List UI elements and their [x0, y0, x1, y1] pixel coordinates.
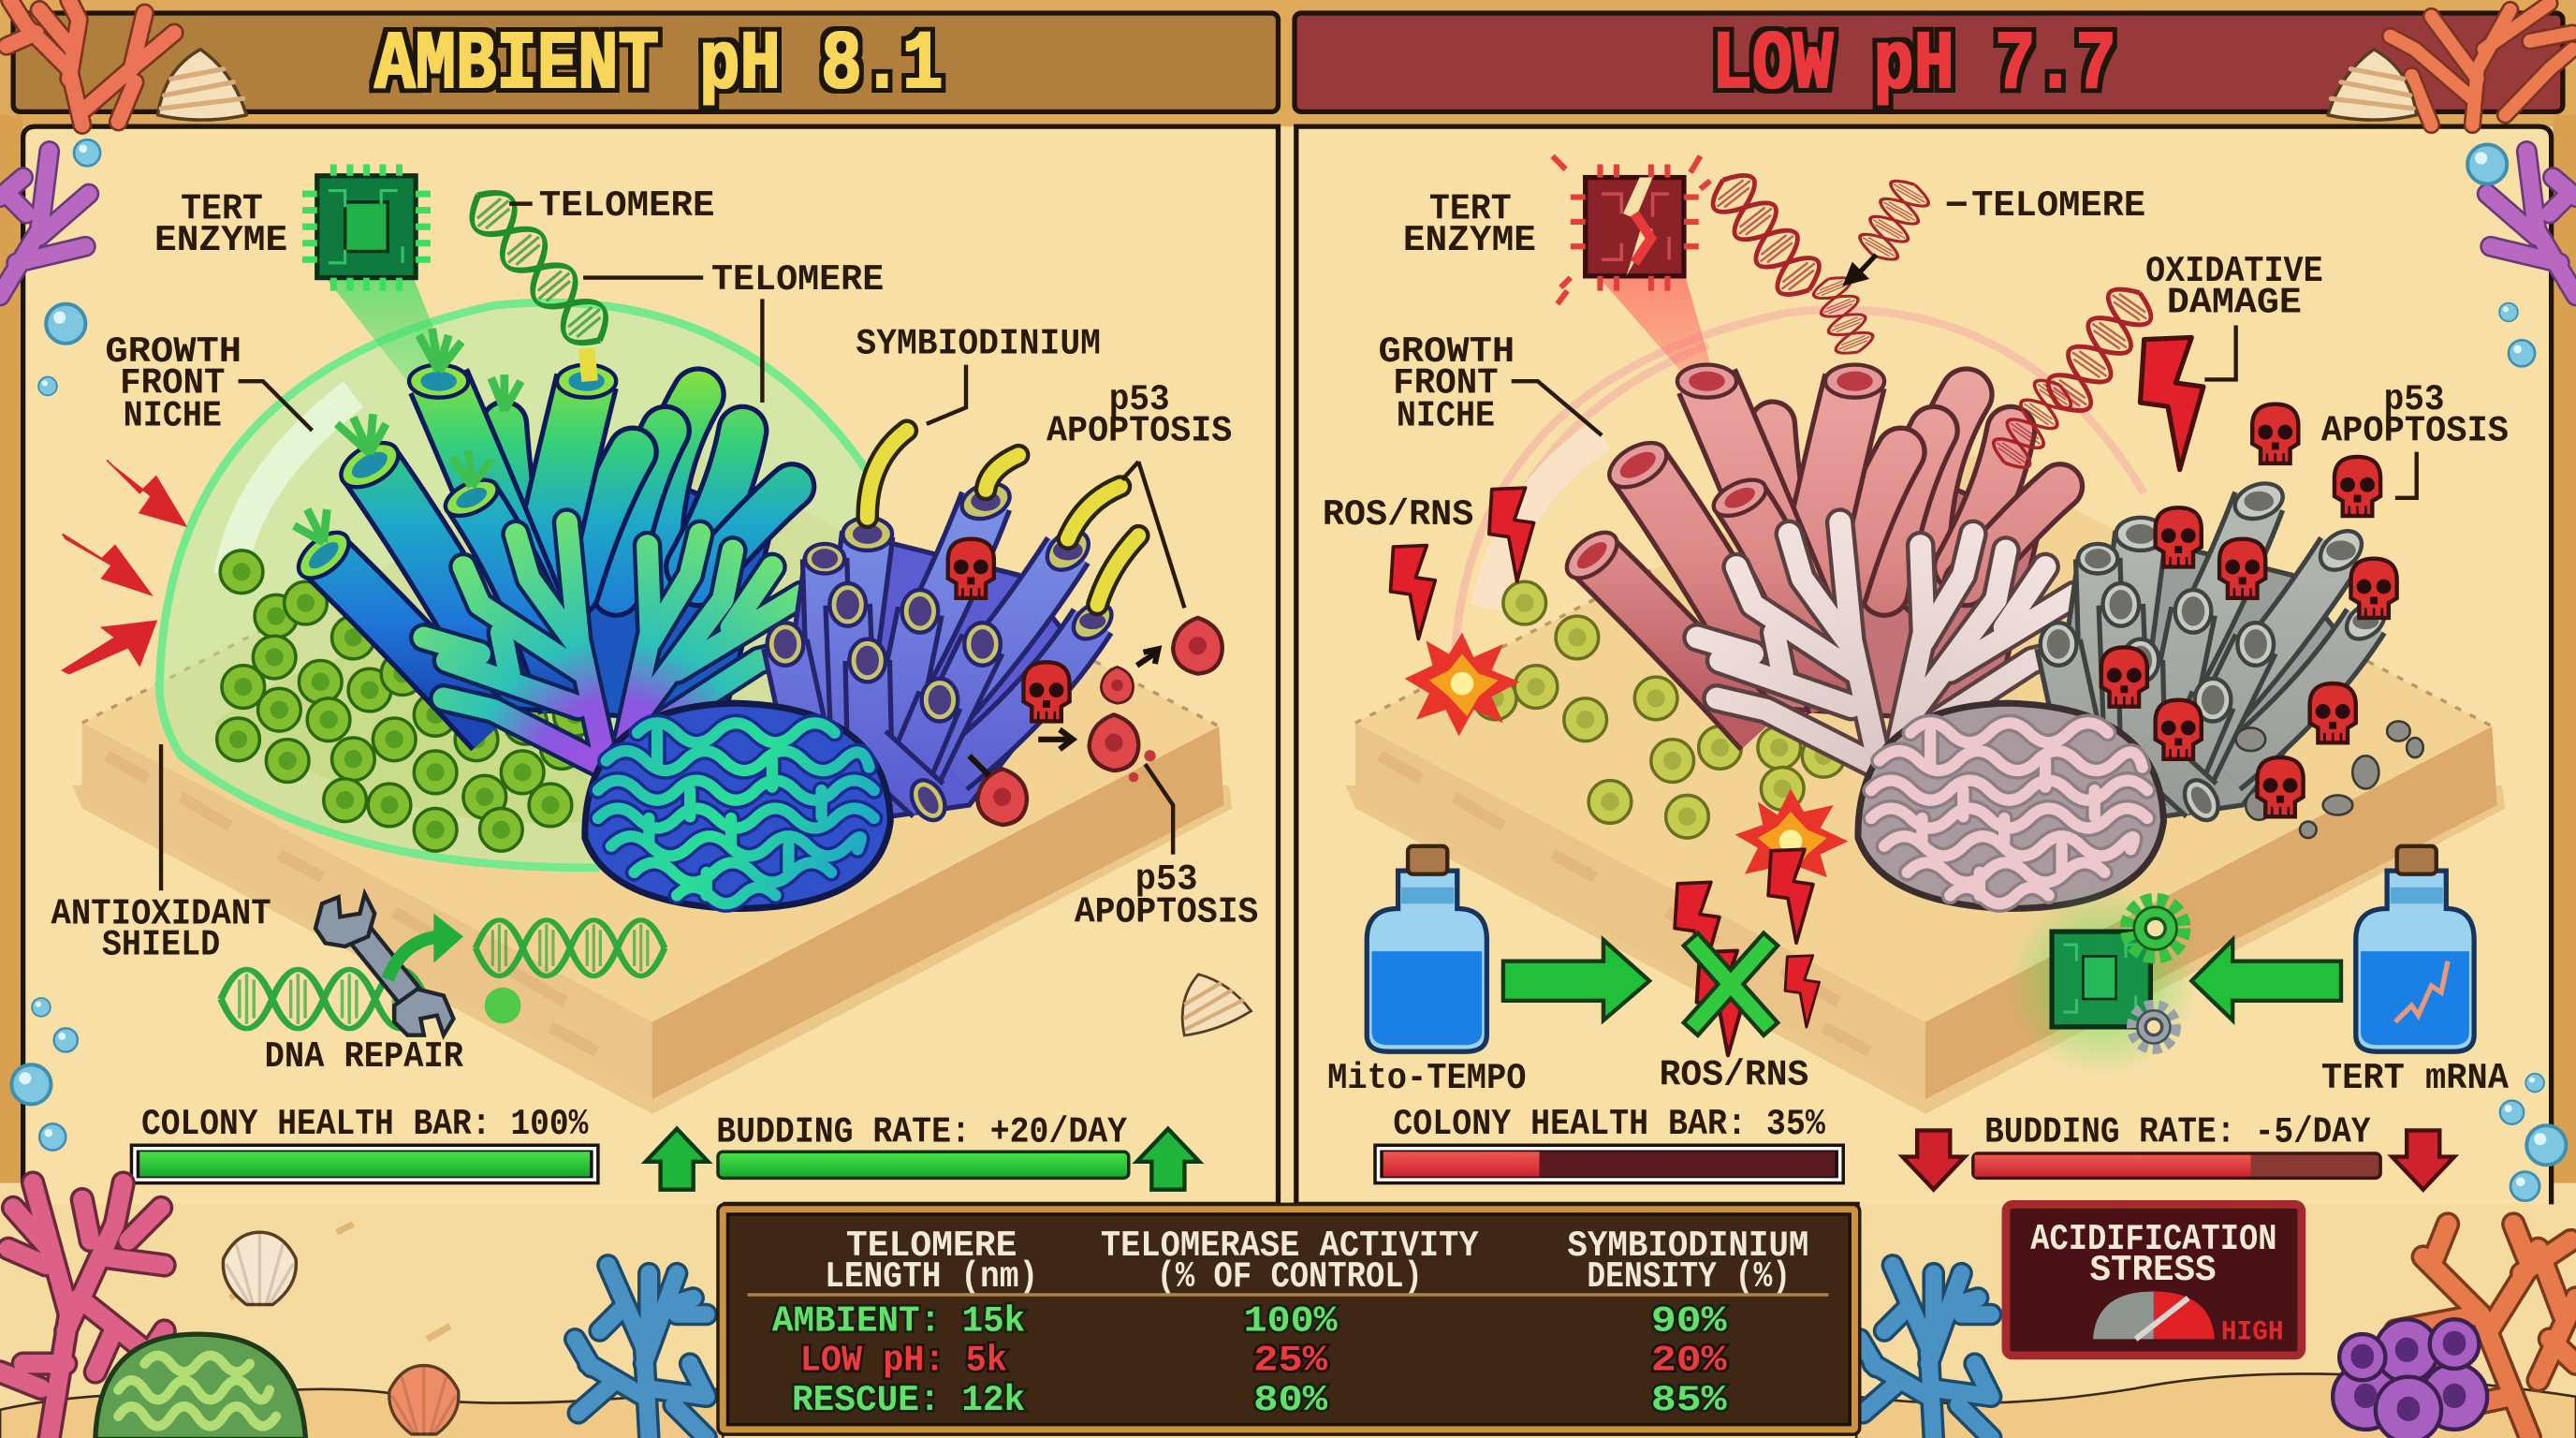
shell on ambient sand — [1166, 961, 1252, 1039]
labels: low pH panel: ROS/RNS — [1323, 494, 1473, 536]
data table: 25% — [1253, 1341, 1328, 1382]
budding rate bar: low pH — [1902, 1112, 2454, 1190]
labels: low pH panel: Mito-TEMPO — [1327, 1058, 1526, 1099]
isometric sand slab: ambient — [72, 431, 1232, 1114]
labels: low pH panel: OXIDATIVE — [2145, 251, 2323, 292]
acidification stress badge: HIGH — [2221, 1315, 2284, 1347]
budding rate bar: ambient — [646, 1112, 1199, 1190]
icon: DNA repair with wrench — [221, 894, 665, 1035]
icon: telomere DNA ambient — [460, 181, 618, 356]
icon: TERT chip ambient — [302, 165, 431, 291]
brain coral: healthy — [585, 703, 890, 909]
labels: ambient panel — [51, 185, 1258, 1078]
data table: 85% — [1651, 1380, 1728, 1421]
symbiodinium cells: ambient — [217, 550, 596, 851]
labels: low pH panel: ENZYME — [1403, 220, 1536, 261]
damaged dome: low pH — [1454, 310, 2144, 674]
apoptosis skulls: low pH — [2101, 404, 2397, 816]
data table: LENGTH (nm) — [825, 1256, 1038, 1298]
labels: ambient panel: NICHE — [124, 396, 222, 437]
icon: bolts crossed by green X — [1675, 849, 1820, 1055]
data table: AMBIENT: 15k — [772, 1301, 1025, 1343]
data table: SYMBIODINIUM — [1567, 1225, 1808, 1267]
data table: 90% — [1651, 1301, 1728, 1343]
decor: bottom corals and shells — [0, 1183, 2576, 1438]
labels: ambient panel: APOPTOSIS — [1075, 892, 1258, 933]
labels: ambient panel: p53 — [1135, 858, 1197, 900]
debris rocks: low pH — [2236, 721, 2423, 838]
telomere cap on tube — [587, 348, 590, 381]
colony health bar: ambient: COLONY HEALTH BAR: 100% — [141, 1104, 589, 1145]
data table: RESCUE: 12k — [792, 1380, 1025, 1421]
explosions — [1405, 633, 1848, 895]
data table: LOW pH: 5k — [800, 1341, 1007, 1382]
labels: ambient panel: DNA REPAIR — [265, 1036, 464, 1078]
staghorn coral: healthy — [424, 522, 809, 788]
labels: low pH panel: DAMAGE — [2167, 282, 2302, 323]
budding rate bar: low pH: BUDDING RATE: -5/DAY — [1984, 1112, 2371, 1153]
symbiodinium cells: low pH — [1473, 581, 1845, 838]
labels: low pH panel: TERT — [1429, 188, 1512, 229]
bleached tube coral — [1559, 365, 2060, 731]
beam from TERT chip: ambient — [320, 271, 463, 403]
colony health bar: low pH: COLONY HEALTH BAR: 35% — [1393, 1104, 1826, 1145]
header: low pH — [1295, 13, 2563, 112]
budding rate bar: ambient: BUDDING RATE: +20/DAY — [716, 1112, 1128, 1153]
labels: low pH panel: GROWTH — [1379, 331, 1515, 373]
isometric sand slab: low pH — [1345, 431, 2505, 1114]
labels: ambient panel: GROWTH — [105, 331, 242, 373]
labels: low pH panel: APOPTOSIS — [2321, 410, 2509, 451]
incoming stress arrows: ambient — [63, 460, 185, 674]
apoptosis skulls and cells: ambient — [948, 539, 1222, 825]
symbiodinium worms leaving tubes — [868, 431, 1138, 605]
symbiodinium shadow patch — [213, 642, 592, 824]
labels: low pH panel: TERT mRNA — [2321, 1058, 2510, 1099]
labels: ambient panel: TELOMERE — [711, 259, 884, 301]
data table: (% OF CONTROL) — [1157, 1256, 1423, 1298]
beam from broken chip — [1593, 271, 1717, 386]
labels: ambient panel: FRONT — [120, 362, 225, 404]
header: ambient: AMBIENT pH 8.1 — [374, 20, 943, 112]
polyps on growth tips — [294, 329, 520, 542]
labels: ambient panel: TELOMERE — [539, 185, 714, 227]
icon: broken telomere DNA — [1704, 165, 2159, 476]
data table: 80% — [1253, 1380, 1328, 1421]
labels: ambient panel: ENZYME — [154, 220, 287, 261]
header: low pH: LOW pH 7.7 — [1712, 20, 2116, 112]
icon: restored chip with gears — [2008, 886, 2198, 1077]
labels: low pH panel: TELOMERE — [1971, 185, 2145, 227]
purple tube coral — [768, 477, 1119, 826]
icon: TERT mRNA vial — [2356, 846, 2474, 1051]
labels: ambient panel: SHIELD — [102, 925, 220, 966]
icons: ROS lightning bolts — [1391, 337, 2203, 639]
arrows: rescue — [1503, 940, 2341, 1020]
labels: ambient panel: APOPTOSIS — [1046, 410, 1232, 451]
bleached brain coral — [1858, 703, 2163, 909]
data table: DENSITY (%) — [1587, 1256, 1791, 1298]
colony health bar: low pH — [1373, 1104, 1845, 1184]
acidification stress badge: ACIDIFICATION — [2030, 1219, 2277, 1260]
labels: low pH panel — [1323, 185, 2510, 1099]
panel: low pH — [1296, 126, 2552, 1204]
labels: low pH panel: ROS/RNS — [1660, 1054, 1808, 1095]
labels: low pH panel: p53 — [2384, 379, 2445, 420]
data table: 100% — [1244, 1301, 1339, 1343]
acidification stress badge — [2006, 1204, 2302, 1356]
antioxidant shield dome — [159, 302, 887, 868]
bleached staghorn coral — [1697, 522, 2082, 788]
panel: ambient — [23, 126, 1278, 1204]
labels: low pH panel: NICHE — [1397, 396, 1495, 437]
dead grey tube coral — [2041, 477, 2392, 826]
acidification stress badge: STRESS — [2089, 1250, 2217, 1291]
labels: ambient panel: p53 — [1109, 379, 1170, 420]
labels: ambient panel: SYMBIODINIUM — [856, 323, 1101, 364]
labels: low pH panel: FRONT — [1393, 362, 1499, 404]
data table — [718, 1204, 1860, 1434]
labels: ambient panel: TERT — [181, 188, 263, 229]
icon: Mito-TEMPO vial — [1367, 846, 1486, 1051]
data table: TELOMERE — [846, 1225, 1017, 1267]
header: ambient — [13, 13, 1278, 112]
branching tube coral: healthy — [290, 365, 792, 731]
data table: TELOMERASE ACTIVITY — [1101, 1225, 1479, 1267]
icon: broken TERT chip — [1553, 156, 1710, 304]
data table: 20% — [1651, 1341, 1728, 1382]
colony health bar: ambient — [130, 1104, 600, 1184]
labels: ambient panel: ANTIOXIDANT — [51, 893, 271, 934]
